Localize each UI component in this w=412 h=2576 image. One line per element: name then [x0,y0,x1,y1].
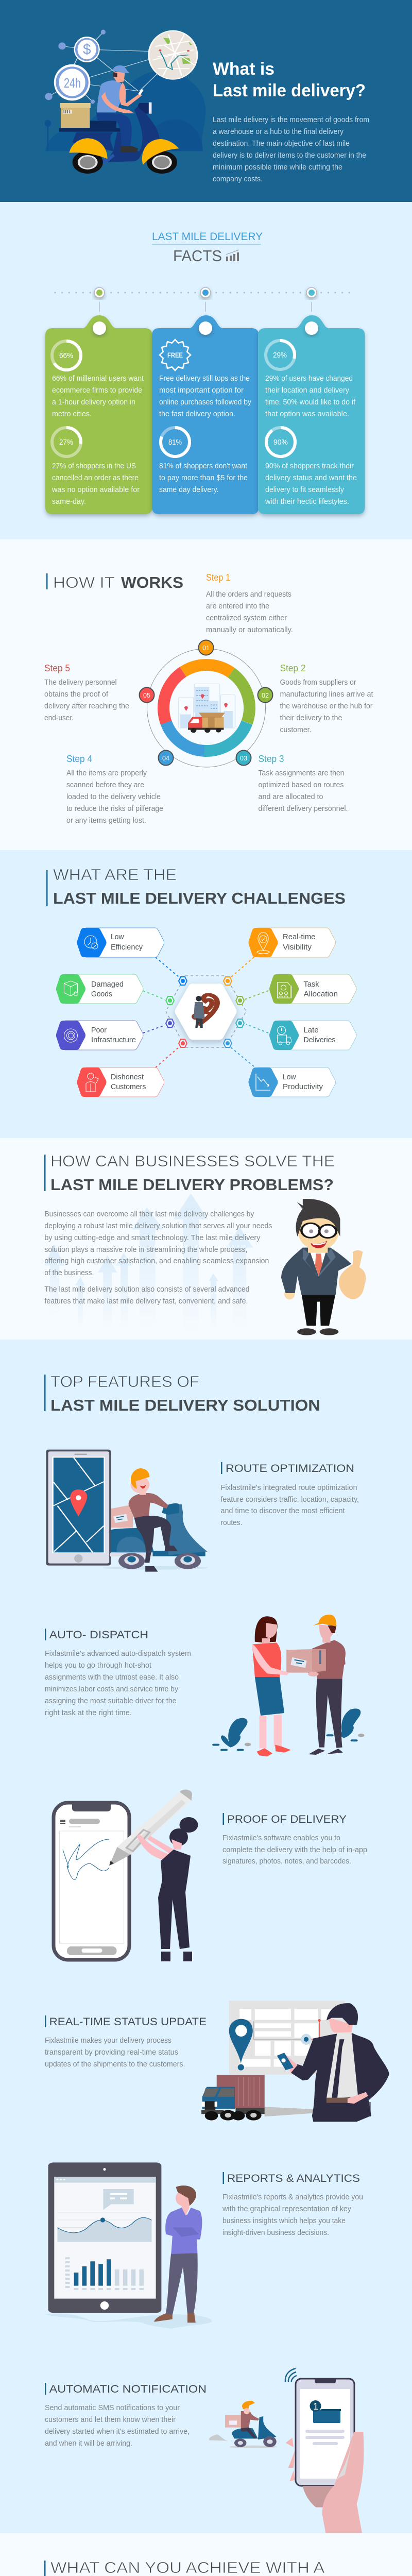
timeline with three nodes [55,287,356,312]
hero description: destination. The main objective of last mile [213,140,350,148]
feature: proof of delivery: Fixlastmile's software enables you to [222,1834,340,1842]
challenge: damaged goods: Goods [91,990,112,998]
challenge: poor infrastructure: Poor [91,1026,107,1035]
text: solving problems paragraph: of the business. [44,1269,94,1277]
panel: what can you achieve [0,2533,412,2576]
panel: how can businesses solve [0,1138,412,1340]
challenge: low productivity [248,1067,336,1097]
text: 27% fact: same-day. [52,498,86,506]
step 5 text [44,663,129,722]
challenge: low productivity: Low [283,1073,296,1081]
text: 66% fact: metro cities. [52,410,92,418]
text: 90% fact: 90% of shoppers track their [265,462,354,470]
challenge: dishonest customers [77,1067,164,1097]
feature: route optimization: ROUTE OPTIMIZATION [226,1463,354,1475]
feature: auto dispatch: Fixlastmile's advanced auto-dispatch system [45,1650,191,1658]
text: 90% fact: delivery to fit seamlessly [265,486,345,494]
feature: route optimization: feature considers traffic, location, capacity, [220,1496,359,1504]
heading: solve problems: LAST MILE DELIVERY PROBLEMS? [50,1176,334,1194]
feature: real-time status update: updates of the shipments to the customers. [45,2060,185,2069]
ring: 66%: 66% [59,351,73,360]
text: 66% fact: ecommerce firms to provide [52,386,142,395]
challenge: low productivity: Productivity [283,1082,323,1091]
feature: proof of delivery: complete the delivery with the help of in-app [222,1846,367,1854]
text: solving problems paragraph: deploying a robust last mile delivery solution that serves all your needs [44,1222,272,1230]
process ring diagram: 02 [262,691,269,699]
hero description: delivery is to deliver items to the customer in the [213,151,366,160]
connector lines [143,957,268,1067]
text: 81% fact [159,462,248,494]
text: solving problems paragraph: features that make last mile delivery fast, convenient, and safe. [44,1297,248,1306]
heading: solve problems [44,1152,335,1194]
text: solving problems paragraph: by using cutting-edge and smart technology. The last mile delivery [44,1234,261,1242]
hero illustration: delivery rider on scooter: $ [83,41,91,57]
step 5 text: obtains the proof of [44,690,109,699]
text: 90% fact [265,462,357,506]
hero title [213,59,366,100]
facts heading: LAST MILE DELIVERY [152,231,263,243]
heading: how it works: WORKS [121,573,183,591]
feature: automatic notification: Send automatic SMS notifications to your [45,2404,180,2412]
illustration: phone map and scooter rider [46,1450,208,1572]
feature: route optimization [220,1462,359,1527]
central hexagon with person and question mark [166,976,246,1047]
hero illustration: delivery rider on scooter [45,30,206,174]
feature: real-time status update: REAL-TIME STATUS UPDATE [49,2016,207,2028]
ring: 29%: 29% [273,351,287,360]
feature: auto dispatch: right task at the right time. [45,1709,132,1717]
illustration: truck tracking map and businessman [201,2001,389,2122]
step 2 text: manufacturing lines arrive at [280,690,373,699]
heading: challenges [46,866,346,907]
heading: challenges: LAST MILE DELIVERY CHALLENGES [53,889,346,907]
feature: real-time status update [45,2015,207,2069]
challenge: low efficiency: Low [111,933,124,941]
feature: proof of delivery [222,1813,367,1866]
hero description: Last mile delivery is the movement of goods from [213,116,369,124]
ring: 90% [266,428,295,456]
text: 29% fact [265,375,356,418]
text: free delivery fact: online purchases followed by [159,398,252,406]
step 1 text [206,572,293,634]
feature: auto dispatch: assignments with the utmost ease. It also [45,1673,179,1682]
feature: auto dispatch [45,1629,191,1717]
icon: free badge [160,340,191,370]
card: blue facts [152,315,259,514]
panel: what is last mile delivery [0,0,412,202]
step 1 text: are entered into the [206,602,269,611]
text: 29% fact: that option was available. [265,410,349,418]
step 5 text: Step 5 [44,663,70,673]
feature: route optimization: routes. [220,1519,242,1527]
text: 29% fact: 29% of users have changed [265,375,353,383]
feature: reports and analytics: with the graphical representation of key [222,2205,352,2213]
heading: top features: LAST MILE DELIVERY SOLUTION [50,1396,320,1414]
text: 29% fact: their location and delivery [265,386,350,395]
ring: 27%: 27% [59,438,73,447]
process ring diagram: 01 [202,644,210,652]
text: 90% fact: delivery status and want the [265,474,357,482]
ring: 81% [161,428,190,456]
panel: last mile delivery challenges [0,850,412,1138]
text: 27% fact [52,462,140,506]
icon: free badge: FREE [167,351,183,359]
challenge: dishonest customers: Customers [111,1082,146,1091]
step 3 text: different delivery personnel. [259,805,348,813]
ring: 81%: 81% [168,438,182,447]
text: 27% fact: was no option available for [52,486,140,494]
illustration: parcel handover [214,1615,365,1756]
facts heading: FACTS [173,247,222,265]
challenge: low efficiency [77,928,164,957]
facts heading [152,231,263,265]
illustration: notification phone in hand with scooter: 1 [313,2401,318,2412]
text: 66% fact [52,375,144,418]
card: green facts [45,315,152,514]
challenge: damaged goods: Damaged [91,980,124,989]
hero description: a warehouse or a hub to the final delivery [213,128,344,136]
feature: reports and analytics: business insights which helps you take [222,2217,346,2225]
text: free delivery fact: most important option for [159,386,244,395]
text: 27% fact: 27% of shoppers in the US [52,462,136,470]
step 3 text: Task assignments are then [259,769,344,777]
challenge: late deliveries [269,1021,356,1050]
step 4 text: All the items are properly [66,769,147,777]
process ring diagram: 04 [162,754,169,762]
panel: last mile delivery facts [0,202,412,539]
heading: top features: TOP FEATURES OF [50,1372,199,1391]
step 3 text: Step 3 [259,754,284,764]
illustration: city and truck in ring centre [179,684,235,733]
step 4 text: Step 4 [66,754,92,764]
challenge: dishonest customers: Dishonest [111,1073,144,1081]
ring: 29% [266,341,295,369]
step 3 text [259,754,348,813]
text: 66% fact: a 1-hour delivery option in [52,398,135,406]
challenge: poor infrastructure: Infrastructure [91,1036,136,1044]
challenge: late deliveries: Late [304,1026,318,1035]
step 5 text: end-user. [44,714,74,722]
challenge: low efficiency: Efficiency [111,943,143,952]
text: solving problems paragraph: offering high customer satisfaction, and enabling seamless expansion [44,1257,269,1265]
card: teal facts [258,315,365,514]
process ring diagram [139,640,273,768]
feature: auto dispatch: assigning the most suitable driver for the [45,1697,177,1705]
step number nodes [139,640,273,766]
step 2 text: Goods from suppliers or [280,679,356,687]
text: 81% fact: 81% of shoppers don't want [159,462,247,470]
step 4 text [66,754,163,825]
feature: proof of delivery: signatures, photos, notes, and barcodes. [222,1857,351,1866]
step 3 text: and are allocated to [259,793,323,801]
feature: reports and analytics: REPORTS & ANALYTICS [227,2173,360,2184]
step 1 text: All the orders and requests [206,590,291,599]
step 1 text: centralized system either [206,614,287,622]
illustration: proof of delivery phone and pen [54,1790,198,1961]
feature: automatic notification: AUTOMATIC NOTIFICATION [49,2383,207,2395]
hero description: company costs. [213,175,263,183]
feature: route optimization: Fixlastmile's integrated route optimization [220,1484,357,1492]
hero title: What is [213,59,274,79]
background arrows [45,1194,253,1334]
hero description [213,116,369,183]
heading: solve problems: HOW CAN BUSINESSES SOLVE THE [50,1152,335,1170]
feature: proof of delivery: PROOF OF DELIVERY [227,1814,347,1825]
challenge: task allocation: Task [304,980,319,989]
process ring diagram: 03 [240,754,247,762]
illustration: businessman thumbs up [281,1199,366,1335]
illustration: tablet analytics and man [44,2162,212,2329]
feature: auto dispatch: helps you to go through hot-shot [45,1662,151,1670]
text: 81% fact: to pay more than $5 for the [159,474,248,482]
feature: automatic notification: and when it will be arriving. [45,2439,132,2448]
text: solving problems paragraph: The last mile delivery solution also consists of several advanced [44,1285,249,1294]
step 4 text: scanned before they are [66,781,144,789]
step 2 text: the warehouse or the hub for [280,702,373,710]
panel: how it works [0,539,412,850]
hero illustration: delivery rider on scooter: 24h [64,75,81,91]
step 4 text: loaded to the delivery vehicle [66,793,161,801]
text: 90% fact: with their hectic lifestyles. [265,498,349,506]
ring: 90%: 90% [273,438,288,447]
feature: auto dispatch: minimizes labor costs and service time by [45,1685,179,1693]
step 4 text: or any items getting lost. [66,817,146,825]
connector hex nodes [166,977,244,1047]
step 2 text: Step 2 [280,663,306,673]
challenge: damaged goods [56,974,143,1004]
challenge: real-time visibility: Real-time [283,933,315,941]
step 1 text: manually or automatically. [206,626,293,634]
challenge: real-time visibility: Visibility [283,943,312,952]
step 5 text: The delivery personnel [44,679,117,687]
text: 81% fact: same day delivery. [159,486,218,494]
heading: challenges: WHAT ARE THE [53,866,177,884]
feature: auto dispatch: AUTO- DISPATCH [49,1629,148,1641]
heading: top features [44,1372,320,1414]
step 2 text: customer. [280,726,311,734]
challenge: task allocation: Allocation [304,990,338,998]
text: solving problems paragraph: Businesses can overcome all their last mile delivery challenges by [44,1210,254,1218]
illustration: notification phone in hand with scooter [209,2368,364,2533]
step 5 text: delivery after reaching the [44,702,129,710]
heading: how it works [46,573,183,591]
feature: automatic notification: customers and let them know when their [45,2416,176,2424]
text: solving problems paragraph: solution plays a massive role in streamlining the whole process, [44,1246,247,1254]
feature: reports and analytics: insight-driven business decisions. [222,2229,329,2237]
challenge: real-time visibility [248,928,336,957]
feature: reports and analytics [222,2172,363,2237]
text: 27% fact: cancelled an order as there [52,474,139,482]
feature: real-time status update: transparent by providing real-time status [45,2048,178,2057]
step 2 text: their delivery to the [280,714,342,722]
text: free delivery fact: Free delivery still tops as the [159,375,250,383]
text: 29% fact: time. 50% would like to do if [265,398,356,406]
ring: 27% [52,428,81,456]
step 1 text: Step 1 [206,572,230,583]
text: free delivery fact: the fast delivery option. [159,410,235,418]
panel: top features [0,1340,412,2533]
feature: route optimization: and time to discover the most efficient [220,1507,345,1515]
feature: automatic notification: delivery started when it's estimated to arrive, [45,2428,190,2436]
text: free delivery fact [159,375,252,418]
heading: how it works: HOW IT [53,573,115,591]
step 2 text [280,663,373,734]
challenge: poor infrastructure [56,1021,143,1050]
hero description: minimum possible time while cutting the [213,163,342,172]
heading: what can you achieve: WHAT CAN YOU ACHIEVE WITH A [50,2558,325,2576]
hero title: Last mile delivery? [213,81,366,100]
text: solving problems paragraph [44,1210,272,1306]
ring: 66% [52,341,81,370]
feature: automatic notification [45,2383,207,2448]
feature: reports and analytics: Fixlastmile's reports & analytics provide you [222,2193,363,2201]
challenge: late deliveries: Deliveries [304,1036,336,1044]
text: 66% fact: 66% of millennial users want [52,375,144,383]
process ring diagram: 05 [143,691,150,699]
step 4 text: to reduce the risks of pilferage [66,805,163,813]
step 3 text: optimized based on routes [259,781,344,789]
challenge: task allocation [269,974,356,1004]
feature: real-time status update: Fixlastmile makes your delivery process [45,2037,171,2045]
